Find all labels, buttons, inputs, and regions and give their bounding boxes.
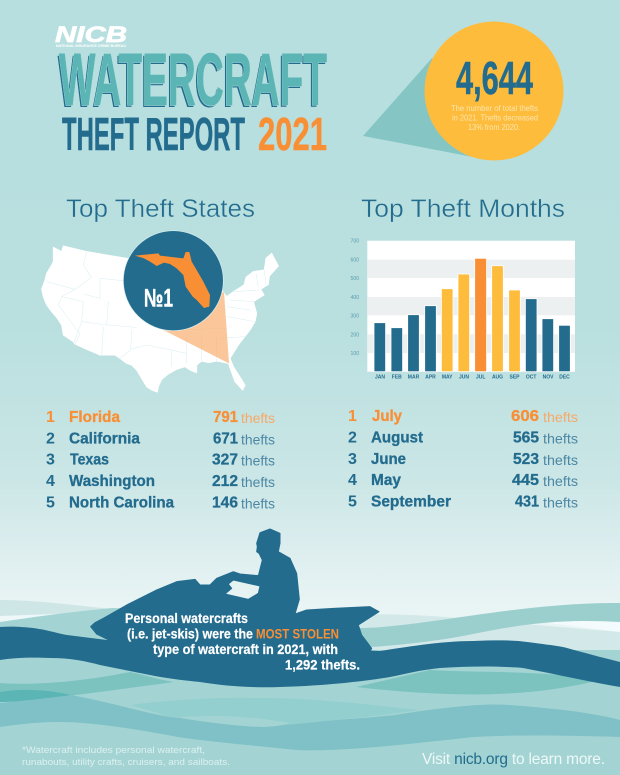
footnote: runabouts, utility crafts, cruisers, and sailboats. [22, 757, 230, 768]
month row 4: May [371, 472, 401, 489]
month row 3: 3 [348, 451, 357, 468]
month row 5: 5 [348, 494, 357, 510]
sea band under the jet ski [0, 627, 620, 687]
month row 3: 523 [513, 451, 539, 468]
month labels: JUL [476, 374, 485, 380]
month row 1: 606 [511, 408, 539, 425]
state row 4: thefts [241, 474, 275, 490]
y axis labels [350, 238, 359, 357]
state row 2: California [69, 430, 140, 448]
state row 4: Washington [69, 473, 155, 490]
state row 4: 212 [212, 473, 238, 490]
state row 1 [46, 409, 275, 426]
month row 4: 445 [512, 472, 539, 489]
month labels: MAR [408, 374, 420, 380]
y axis labels: 500 [350, 276, 359, 282]
y axis labels: 600 [350, 258, 359, 264]
y axis labels: 700 [350, 238, 359, 244]
NICB logo: NICB [55, 22, 127, 47]
website call to action: Visit nicb.org to learn more. [422, 751, 605, 768]
month labels: JUN [459, 374, 469, 380]
state row 2: 671 [213, 430, 238, 448]
total thefts callout [363, 22, 564, 160]
title: 2021: 2021 [258, 108, 327, 160]
month row 2: 565 [513, 430, 539, 446]
state row 3: thefts [241, 452, 275, 468]
month row 3: thefts [543, 452, 578, 468]
title: Watercraft [58, 38, 327, 123]
month labels: APR [425, 374, 436, 380]
personal watercraft callout text: 1,292 thefts. [285, 658, 360, 672]
footnote [22, 745, 230, 768]
bars [374, 258, 570, 372]
month row 2 [348, 430, 578, 446]
personal watercraft callout text: type of watercraft in 2021, with [153, 642, 338, 657]
month row 2: 2 [348, 430, 357, 446]
heading: top theft states: Top Theft States [66, 195, 255, 223]
state row 1: Florida [69, 409, 120, 426]
month row 1: July [372, 408, 402, 425]
month row 1 [348, 408, 578, 425]
title: Watercraft: WATERCRAFT [59, 38, 327, 121]
cone from circle to Florida [163, 292, 229, 363]
month labels: OCT [526, 374, 536, 380]
month row 1: 1 [348, 408, 357, 425]
month labels: NOV [543, 374, 554, 380]
state row 5: 5 [46, 494, 55, 512]
callout description: 13% from 2020. [468, 123, 520, 132]
month row 5 [348, 494, 578, 510]
plot area [367, 241, 575, 372]
state row 3: 327 [212, 452, 238, 468]
month row 2: thefts [543, 430, 578, 446]
number one label: №1 [144, 285, 173, 313]
US map with Florida highlight [42, 231, 278, 392]
state row 5 [46, 494, 275, 512]
heading: top theft months: Top Theft Months [361, 195, 565, 223]
state row 2: thefts [241, 432, 275, 448]
month labels: AUG [492, 374, 503, 380]
y axis labels: 200 [350, 332, 359, 338]
month labels: MAY [442, 374, 453, 380]
state row 3: 3 [46, 452, 55, 468]
month row 3: June [371, 451, 406, 468]
personal watercraft callout text [125, 611, 360, 672]
month row 4 [348, 472, 578, 489]
month labels: DEC [559, 374, 570, 380]
state row 1: 1 [46, 409, 55, 426]
month row 4: thefts [543, 473, 578, 489]
title: Watercraft: WATERCRAFT [59, 38, 327, 121]
callout description: in 2021. Thefts decreased [452, 114, 538, 122]
month row 5: thefts [543, 494, 578, 510]
personal watercraft callout text: (i.e. jet-skis) were the [127, 626, 253, 642]
jet ski and rider silhouette [91, 529, 379, 670]
month row 3 [348, 451, 578, 468]
personal watercraft callout text: MOST STOLEN [256, 626, 339, 642]
state row 5: 146 [212, 494, 238, 512]
month labels: SEP [509, 374, 520, 380]
month labels: FEB [392, 374, 402, 380]
footnote: *Watercraft includes personal watercraft, [22, 745, 205, 756]
personal watercraft callout text: Personal watercrafts [125, 611, 248, 626]
state row 1: 791 [213, 409, 238, 426]
month row 1: thefts [543, 409, 578, 425]
NICB logo: NATIONAL INSURANCE CRIME BUREAU [56, 44, 126, 48]
month row 5: 431 [515, 494, 539, 510]
month labels: JAN [375, 374, 385, 380]
state row 5: North Carolina [69, 494, 174, 512]
number one circle [123, 231, 223, 331]
state row 4 [46, 473, 275, 490]
y axis labels: 300 [350, 314, 359, 320]
list: top theft months [348, 408, 578, 510]
state row 3 [46, 452, 275, 468]
y axis labels: 400 [350, 295, 359, 301]
state row 4: 4 [46, 473, 55, 490]
list: top theft states [46, 409, 275, 512]
callout description: The number of total thefts [451, 104, 538, 113]
state row 2: 2 [46, 430, 55, 448]
month row 2: August [371, 430, 424, 446]
state row 2 [46, 430, 275, 448]
Florida shape [135, 252, 210, 308]
state row 5: thefts [241, 496, 275, 512]
month row 4: 4 [348, 472, 357, 489]
title: Theft Report: THEFT REPORT [62, 108, 245, 160]
state row 1: thefts [241, 410, 275, 426]
callout number: 4,644 [456, 52, 533, 104]
background waves [0, 600, 620, 775]
bar chart: thefts by month [350, 238, 575, 380]
month labels [375, 374, 570, 380]
callout description [451, 104, 538, 132]
map outline [42, 246, 278, 392]
callout pointer [363, 58, 473, 157]
callout circle [424, 22, 564, 160]
month row 5: September [371, 494, 451, 510]
title: Watercraft: WATERCRAFT [58, 40, 326, 123]
state row 3: Texas [70, 452, 109, 468]
y axis labels: 100 [350, 351, 359, 357]
